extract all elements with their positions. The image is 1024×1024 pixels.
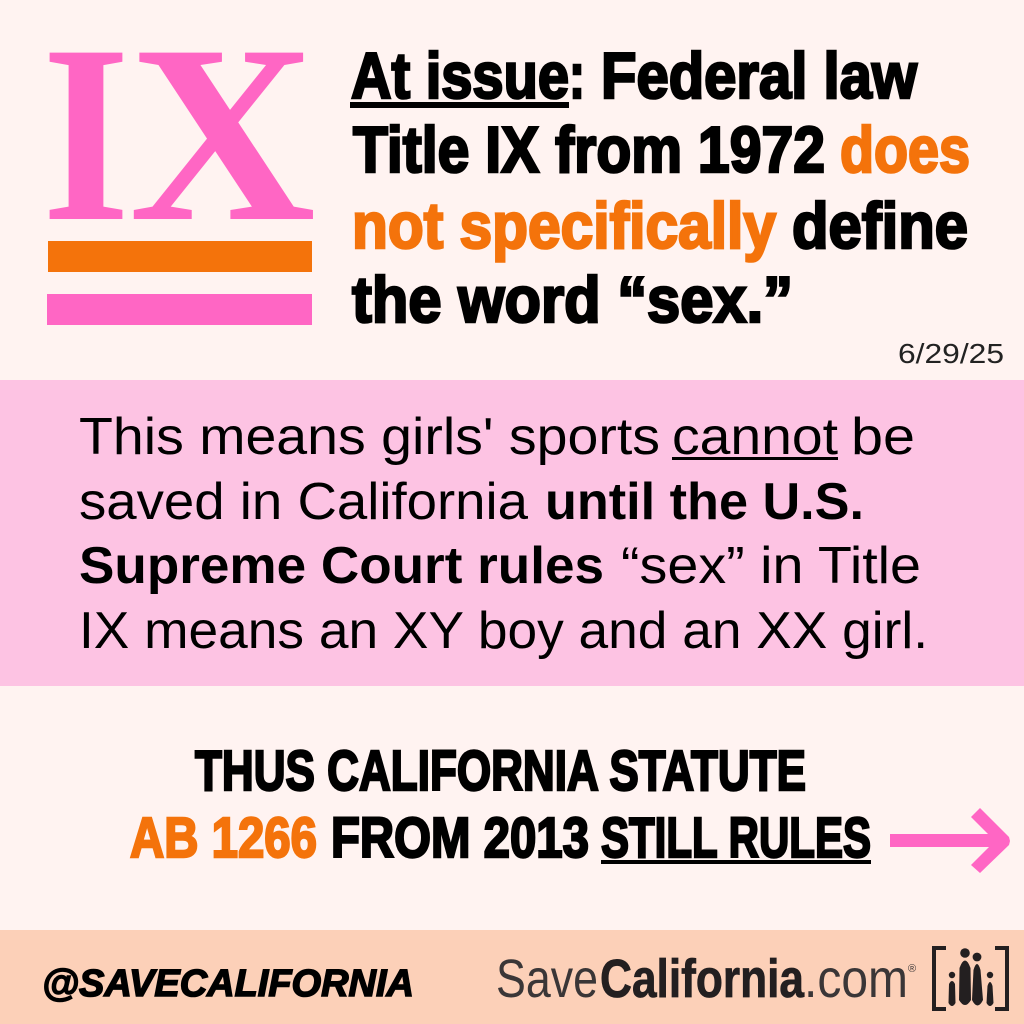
website wordmark: ® bbox=[908, 963, 916, 975]
arrow bbox=[890, 808, 1010, 873]
date: 6/29/25 bbox=[898, 338, 1004, 369]
heading: at issue: the word “sex.” bbox=[352, 263, 793, 336]
conclusion text bbox=[130, 739, 871, 870]
heading: at issue: At issue bbox=[351, 39, 569, 112]
website wordmark bbox=[496, 949, 916, 1009]
conclusion text: AB 1266 bbox=[130, 806, 317, 870]
social handle: @SAVECALIFORNIA bbox=[42, 963, 414, 1005]
body text: “sex” in Title bbox=[621, 537, 921, 595]
website wordmark: California bbox=[600, 949, 805, 1009]
body text: until the U.S. bbox=[545, 473, 864, 531]
conclusion text: STILL RULES bbox=[601, 806, 871, 870]
website wordmark: .com bbox=[804, 949, 908, 1009]
heading: at issue: Federal law bbox=[601, 39, 917, 112]
conclusion text: THUS CALIFORNIA STATUTE bbox=[195, 739, 806, 803]
icon: bracketed people logo bbox=[934, 948, 1007, 1009]
heading: at issue: does bbox=[840, 113, 970, 186]
logo: IX with two bars bbox=[42, 0, 316, 325]
body text bbox=[79, 408, 928, 660]
conclusion text: FROM 2013 bbox=[331, 806, 589, 870]
body text: Supreme Court rules bbox=[79, 537, 604, 595]
heading: at issue: Title IX from 1972 bbox=[353, 113, 825, 186]
heading: at issue: not specifically bbox=[352, 189, 776, 262]
footer band bbox=[0, 930, 1024, 1024]
body text: This means girls' sports bbox=[79, 408, 660, 466]
body text: cannot bbox=[672, 408, 839, 466]
body text: IX means an XY boy and an XX girl. bbox=[79, 602, 928, 660]
heading: at issue bbox=[350, 39, 970, 336]
logo: IX with two bars: X bbox=[129, 0, 316, 274]
body text: be bbox=[851, 408, 915, 466]
website wordmark: Save bbox=[496, 949, 598, 1009]
panel: pink explanation band bbox=[0, 380, 1024, 686]
heading: at issue: : bbox=[569, 39, 585, 112]
heading: at issue: define bbox=[792, 189, 968, 262]
body text: saved in California bbox=[79, 473, 528, 531]
logo: IX with two bars: I bbox=[42, 0, 130, 274]
